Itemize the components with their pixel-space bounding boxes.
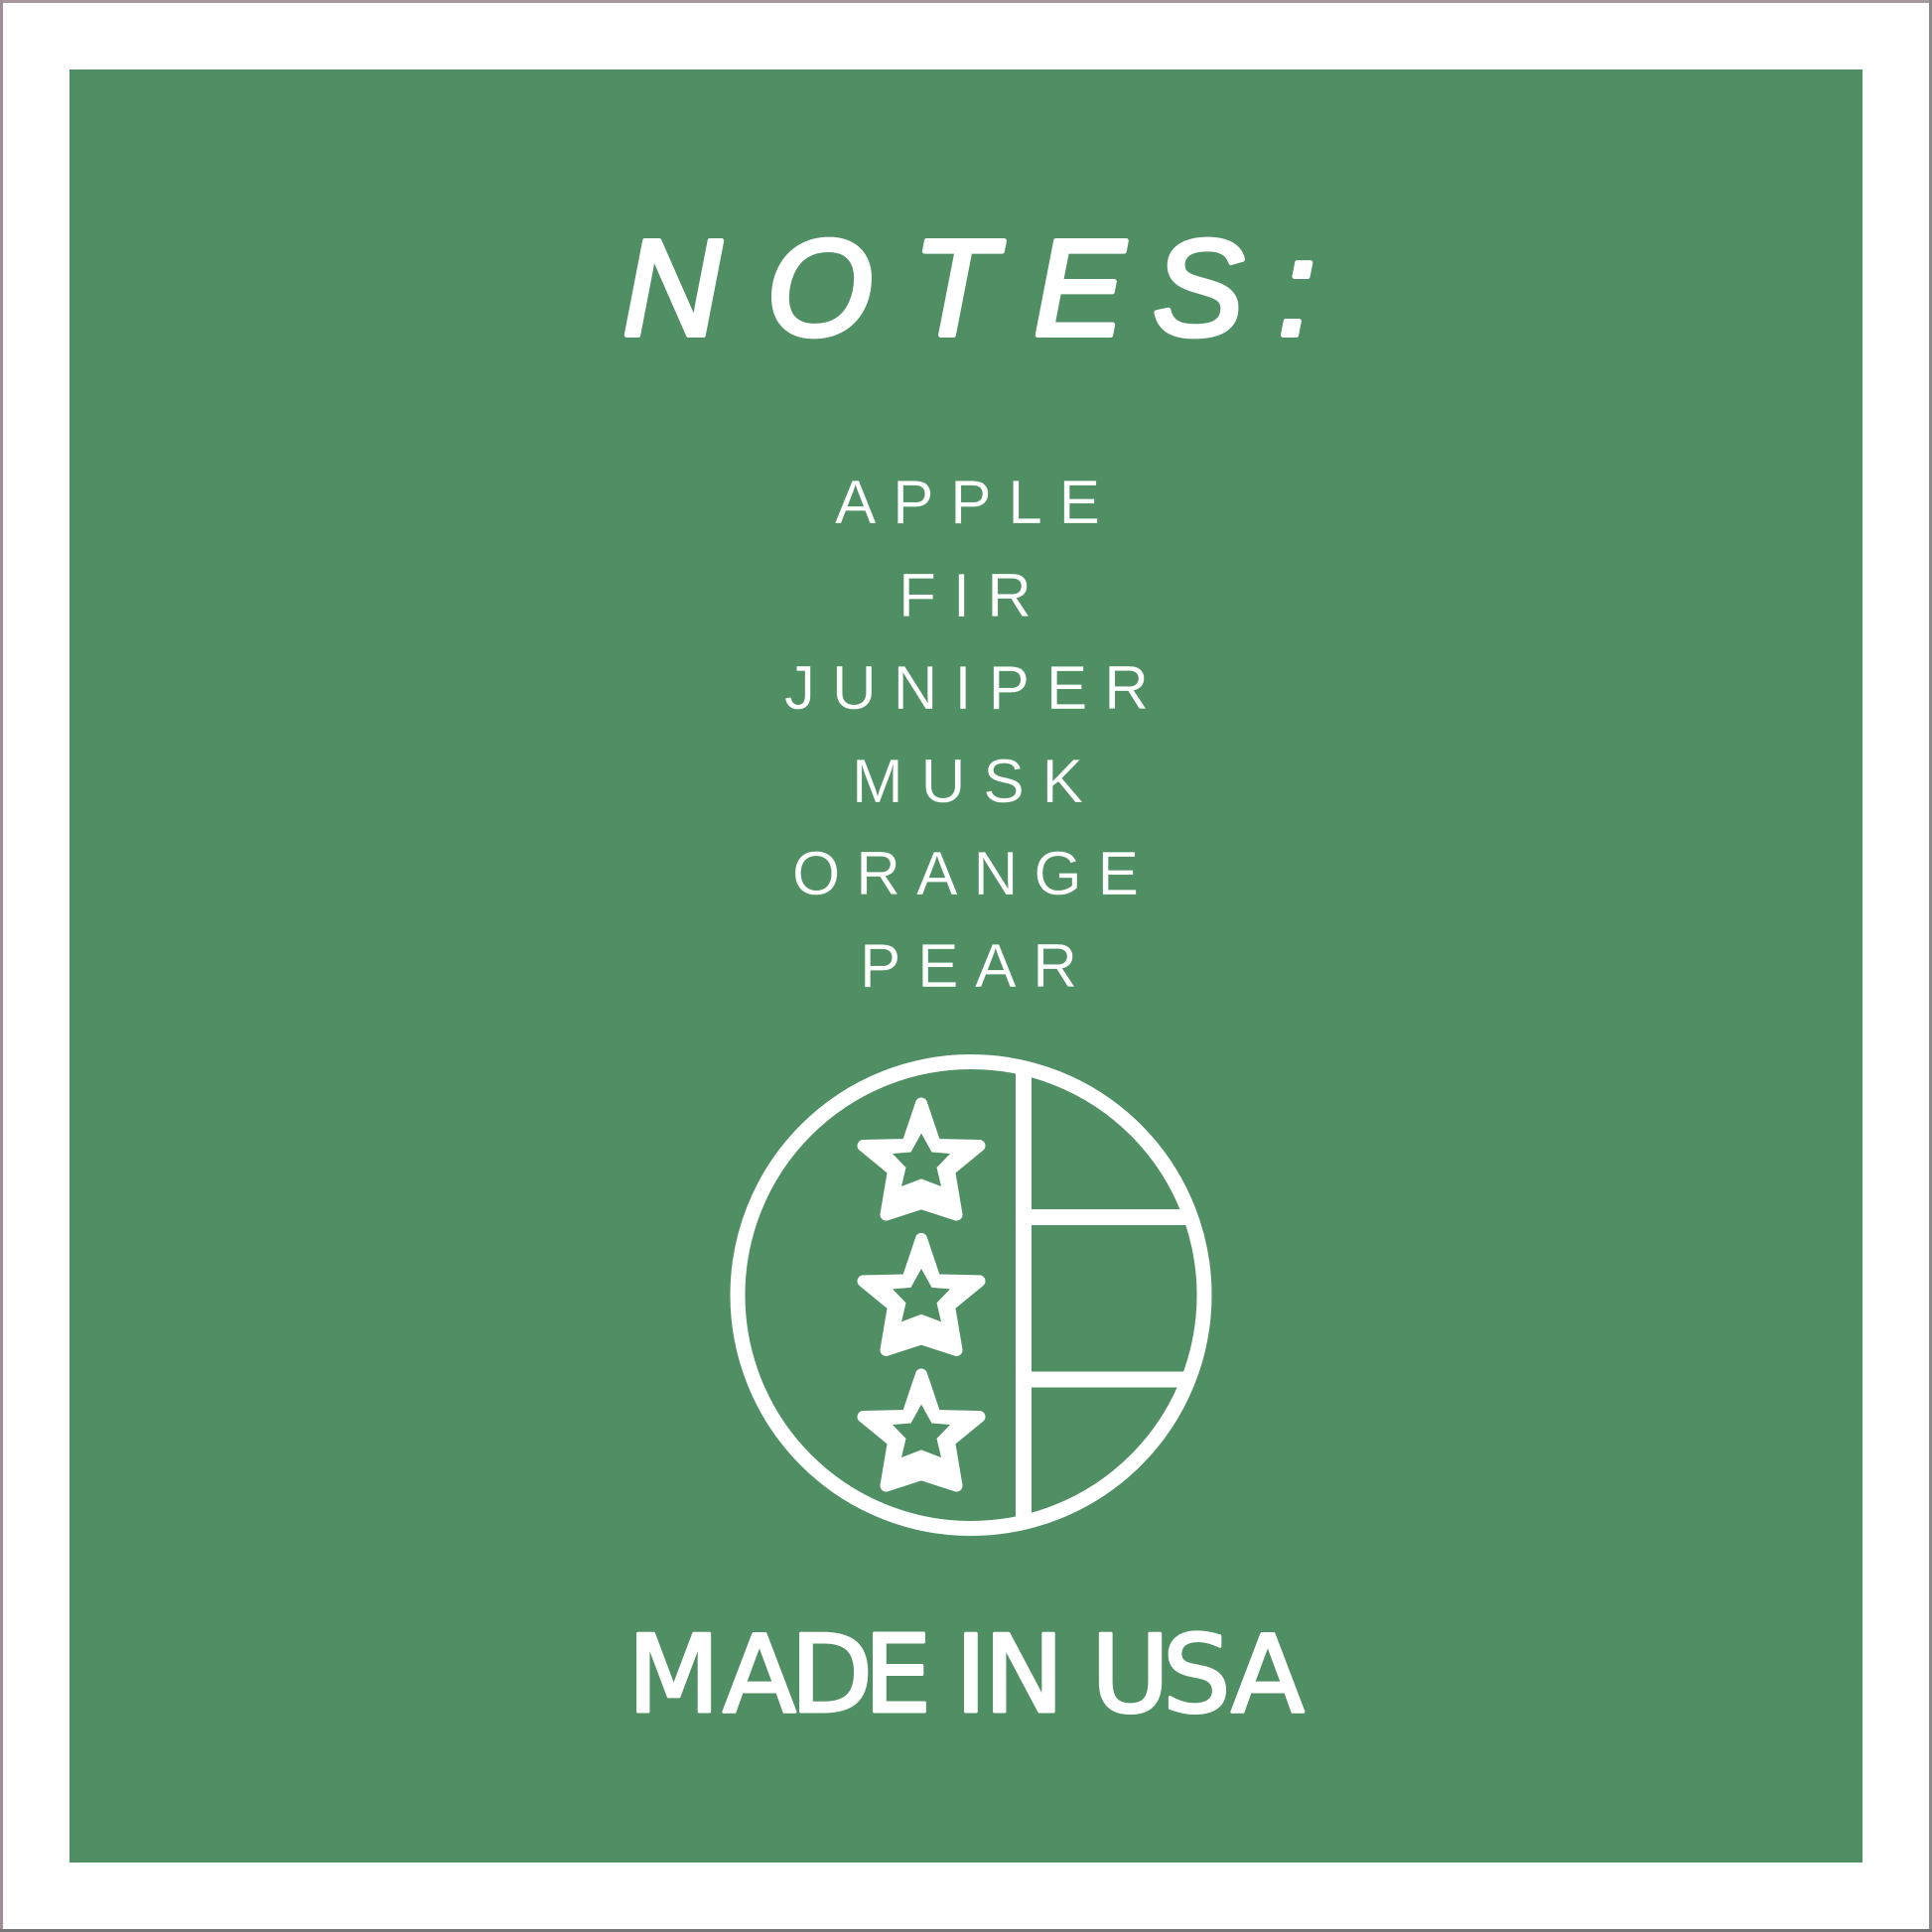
flag vertical divider [1016,1064,1032,1527]
label: MADE IN USA: MADE IN USA [627,1613,1305,1737]
star 3 [864,1374,979,1485]
flag upper stripe line [1024,1209,1187,1225]
note: musk: MUSK [852,748,1083,816]
note: juniper: JUNIPER [784,654,1149,723]
flag lower stripe line [1024,1372,1187,1388]
title: NOTES: NOTES: [622,212,1315,365]
note: apple: APPLE [835,469,1100,537]
flag stars [864,1104,979,1485]
flag circle outline [738,1062,1204,1529]
star 2 [864,1239,979,1350]
star 1 [864,1104,979,1215]
note: pear: PEAR [860,932,1077,1001]
list of scent notes [784,469,1149,1001]
icon: USA flag circle badge [738,1062,1204,1529]
note: fir: FIR [898,562,1032,630]
note: orange: ORANGE [792,840,1139,908]
